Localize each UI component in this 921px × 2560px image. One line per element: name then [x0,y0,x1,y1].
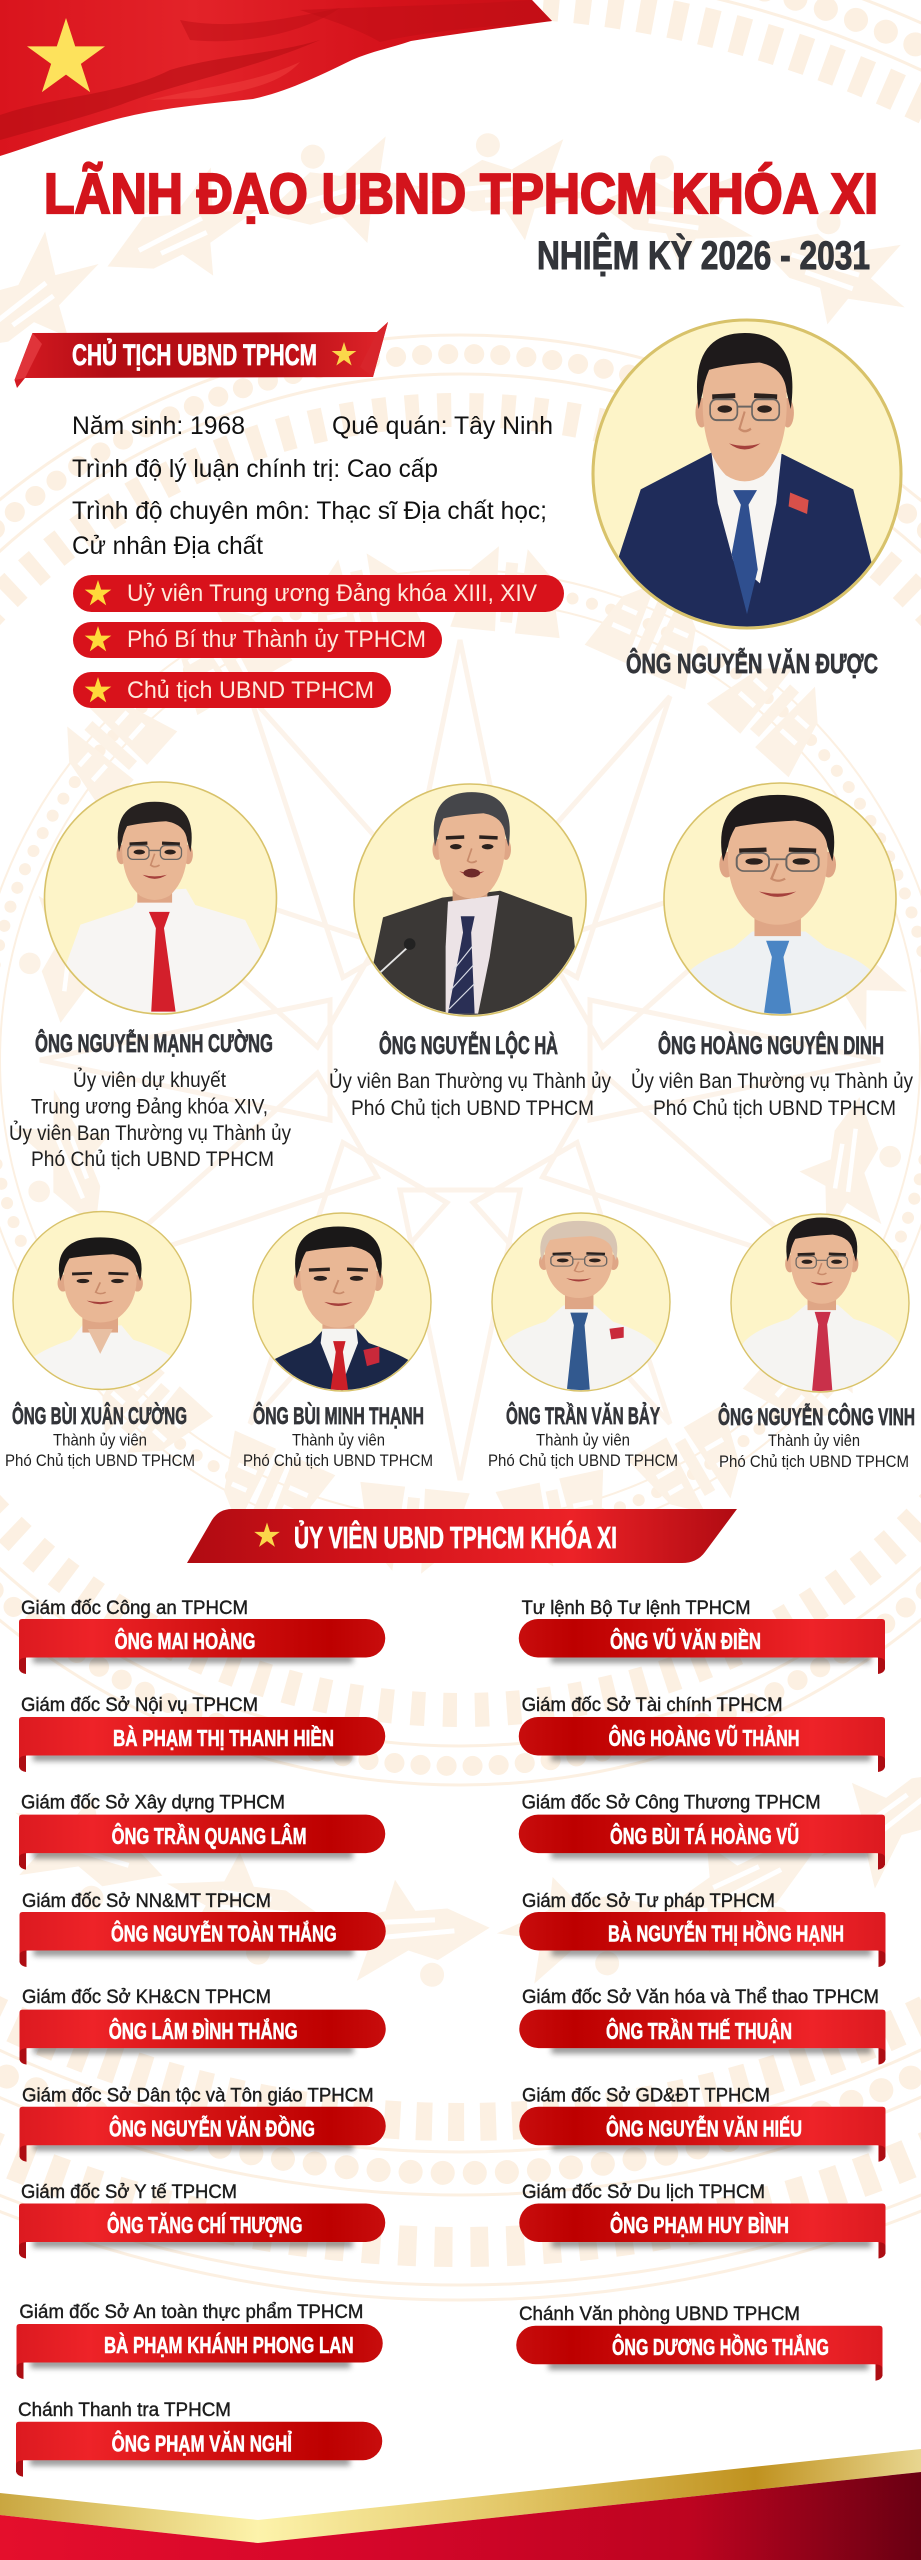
portrait: Nguyễn Mạnh Cường [45,782,277,1014]
roles: Phó Chủ tịch UBND TPHCM [31,1148,274,1171]
member: Dương Hồng Thắng: Chánh Văn phòng UBND TPHCM [519,2304,800,2325]
member: Bùi Tá Hoàng Vũ [519,1793,885,1870]
chairman bio text: Quê quán: Tây Ninh [332,412,553,440]
member: Phạm Văn Nghỉ: Chánh Thanh tra TPHCM [18,2400,231,2421]
chairman bio text: Năm sinh: 1968 [72,412,245,440]
member: Phạm Thị Thanh Hiền: Giám đốc Sở Nội vụ TPHCM [21,1695,258,1716]
member: Lâm Đình Thắng: Giám đốc Sở KH&CN TPHCM [22,1987,271,2008]
member: Trần Quang Lâm [19,1793,385,1870]
member: Nguyễn Văn Hiếu [519,2086,886,2162]
member: Nguyễn Văn Hiếu: Giám đốc Sở GD&ĐT TPHCM [522,2086,770,2107]
name: ÔNG BÙI XUÂN CƯỜNG [12,1402,187,1430]
member: Hoàng Vũ Thảnh: ÔNG HOÀNG VŨ THẢNH [608,1723,800,1751]
heading ribbon: members: ỦY VIÊN UBND TPHCM KHÓA XI [294,1519,617,1555]
member: Dương Hồng Thắng: ÔNG DƯƠNG HỒNG THẮNG [612,2333,829,2360]
member: Mai Hoàng: Giám đốc Công an TPHCM [21,1598,248,1619]
roles: Phó Chủ tịch UBND TPHCM [243,1452,433,1470]
pill: chairman role: Chủ tịch UBND TPHCM [127,677,374,704]
member: Nguyễn Thị Hồng Hạnh: Giám đốc Sở Tư pháp TPHCM [522,1891,775,1912]
member: Hoàng Vũ Thảnh: Giám đốc Sở Tài chính TPHCM [522,1695,783,1716]
chairman bio text: Trình độ chuyên môn: Thạc sĩ Địa chất học; [72,497,547,525]
member: Phạm Huy Bình [519,2182,886,2258]
member: Nguyễn Văn Hiếu: ÔNG NGUYỄN VĂN HIẾU [606,2114,802,2142]
panel: vice chairman Nguyễn Lộc Hà [329,784,611,1120]
member: Tăng Chí Thượng: Giám đốc Sở Y tế TPHCM [21,2182,237,2203]
member: Phạm Khánh Phong Lan: Giám đốc Sở An toàn thực phẩm TPHCM [19,2302,363,2323]
portrait: Nguyễn Lộc Hà [354,784,586,1016]
panel: vice chairman Bùi Minh Thạnh [243,1213,433,1470]
roles: Thành ủy viên [536,1432,630,1450]
member: Nguyễn Toàn Thắng: Giám đốc Sở NN&MT TPHCM [22,1891,271,1912]
member: Phạm Văn Nghỉ [16,2400,382,2477]
name: ÔNG TRẦN VĂN BẢY [506,1401,660,1430]
chairman bio text: Cử nhân Địa chất [72,532,263,560]
member: Nguyễn Văn Đồng: Giám đốc Sở Dân tộc và Tôn giáo TPHCM [22,2086,374,2107]
icon: flag star [27,18,105,92]
member: Nguyễn Văn Đồng: ÔNG NGUYỄN VĂN ĐỒNG [109,2114,315,2142]
member: Trần Thế Thuận: Giám đốc Sở Văn hóa và Thể thao TPHCM [522,1987,879,2008]
member: Hoàng Vũ Thảnh [519,1695,885,1772]
member: Nguyễn Toàn Thắng: ÔNG NGUYỄN TOÀN THẮNG [111,1918,337,1946]
roles: Thành ủy viên [292,1432,385,1450]
roles [719,1432,909,1471]
member: Tăng Chí Thượng [19,2182,385,2258]
portrait: Nguyễn Công Vinh [731,1214,909,1392]
roles: Ủy viên Ban Thường vụ Thành ủy [329,1069,611,1093]
roles: Phó Chủ tịch UBND TPHCM [5,1452,195,1470]
roles: Ủy viên Ban Thường vụ Thành ủy [9,1121,291,1145]
member: Mai Hoàng: ÔNG MAI HOÀNG [114,1627,256,1654]
panel: chairman [14,320,901,708]
panel: vice chairman Bùi Xuân Cường [5,1212,195,1470]
roles: Phó Chủ tịch UBND TPHCM [488,1452,678,1470]
chairman bio text: Trình độ lý luận chính trị: Cao cấp [72,455,438,483]
member: Phạm Khánh Phong Lan [16,2302,383,2379]
portrait: Bùi Xuân Cường [13,1212,191,1390]
heading ribbon: members [187,1509,737,1563]
member: Nguyễn Thị Hồng Hạnh [519,1891,886,1967]
heading ribbon: chairman: CHỦ TỊCH UBND TPHCM [72,338,317,372]
panel: vice chairman Hoàng Nguyên Dinh [631,783,913,1120]
pill: chairman role [73,672,391,708]
panel: vice chairman Nguyễn Công Vinh [718,1214,915,1471]
portrait: Nguyễn Văn Được [593,320,901,628]
panel: vice chairman Trần Văn Bảy [488,1213,678,1470]
roles: Trung ương Đảng khóa XIV, [31,1096,268,1118]
member: Trần Thế Thuận: ÔNG TRẦN THẾ THUẬN [606,2017,792,2044]
pill: deputy secretary: Phó Bí thư Thành ủy TPHCM [127,626,426,653]
member: Bùi Tá Hoàng Vũ: ÔNG BÙI TÁ HOÀNG VŨ [610,1822,799,1849]
roles [488,1432,678,1470]
name: ÔNG BÙI MINH THẠNH [253,1402,424,1430]
chairman bio text [72,412,553,560]
pill: party central committee [73,575,564,612]
heading ribbon: chairman [14,322,388,388]
roles [329,1069,611,1120]
name: ÔNG NGUYỄN MẠNH CƯỜNG [35,1028,273,1058]
portrait: Hoàng Nguyên Dinh [664,783,896,1015]
member: Vũ Văn Điền: ÔNG VŨ VĂN ĐIỀN [610,1627,761,1654]
member: Phạm Huy Bình: Giám đốc Sở Du lịch TPHCM [522,2182,765,2203]
member: Mai Hoàng [19,1598,385,1674]
member: Phạm Văn Nghỉ: ÔNG PHẠM VĂN NGHỈ [112,2429,292,2457]
member: Phạm Thị Thanh Hiền: BÀ PHẠM THỊ THANH HIỀN [113,1724,334,1751]
member: Nguyễn Văn Đồng [20,2086,386,2162]
roles: Thành ủy viên [53,1432,147,1450]
member: Trần Quang Lâm: ÔNG TRẦN QUANG LÂM [112,1822,307,1849]
panel: vice chairman Nguyễn Mạnh Cường [9,782,291,1171]
flag banner top left [0,0,552,156]
roles [5,1432,195,1470]
pill: party central committee: Uỷ viên Trung ương Đảng khóa XIII, XIV [127,580,537,607]
portrait: Trần Văn Bảy [492,1213,670,1391]
member: Trần Quang Lâm: Giám đốc Sở Xây dựng TPHCM [21,1793,285,1814]
member: Lâm Đình Thắng [20,1987,386,2065]
portrait: Bùi Minh Thạnh [253,1213,431,1391]
roles [9,1068,291,1171]
member: Phạm Huy Bình: ÔNG PHẠM HUY BÌNH [610,2211,789,2238]
roles: Phó Chủ tịch UBND TPHCM [351,1097,594,1120]
member: Vũ Văn Điền [519,1598,885,1674]
member: Bùi Tá Hoàng Vũ: Giám đốc Sở Công Thương TPHCM [522,1793,821,1814]
member: Phạm Khánh Phong Lan: BÀ PHẠM KHÁNH PHONG LAN [104,2331,354,2358]
member: Lâm Đình Thắng: ÔNG LÂM ĐÌNH THẮNG [109,2017,298,2044]
pill: deputy secretary [73,622,442,658]
roles: Thành ủy viên [768,1432,860,1450]
roles: Ủy viên dự khuyết [73,1068,226,1092]
member: Tăng Chí Thượng: ÔNG TĂNG CHÍ THƯỢNG [107,2211,302,2238]
footer band [0,2449,921,2560]
member: Vũ Văn Điền: Tư lệnh Bộ Tư lệnh TPHCM [522,1598,751,1619]
roles [631,1069,913,1120]
member: Phạm Thị Thanh Hiền [19,1695,385,1772]
member: Trần Thế Thuận [519,1987,886,2065]
name: ÔNG NGUYỄN LỘC HÀ [379,1030,558,1060]
member: Nguyễn Toàn Thắng [20,1891,386,1967]
roles: Phó Chủ tịch UBND TPHCM [653,1097,896,1120]
roles [243,1432,433,1470]
member: Dương Hồng Thắng [516,2304,882,2381]
